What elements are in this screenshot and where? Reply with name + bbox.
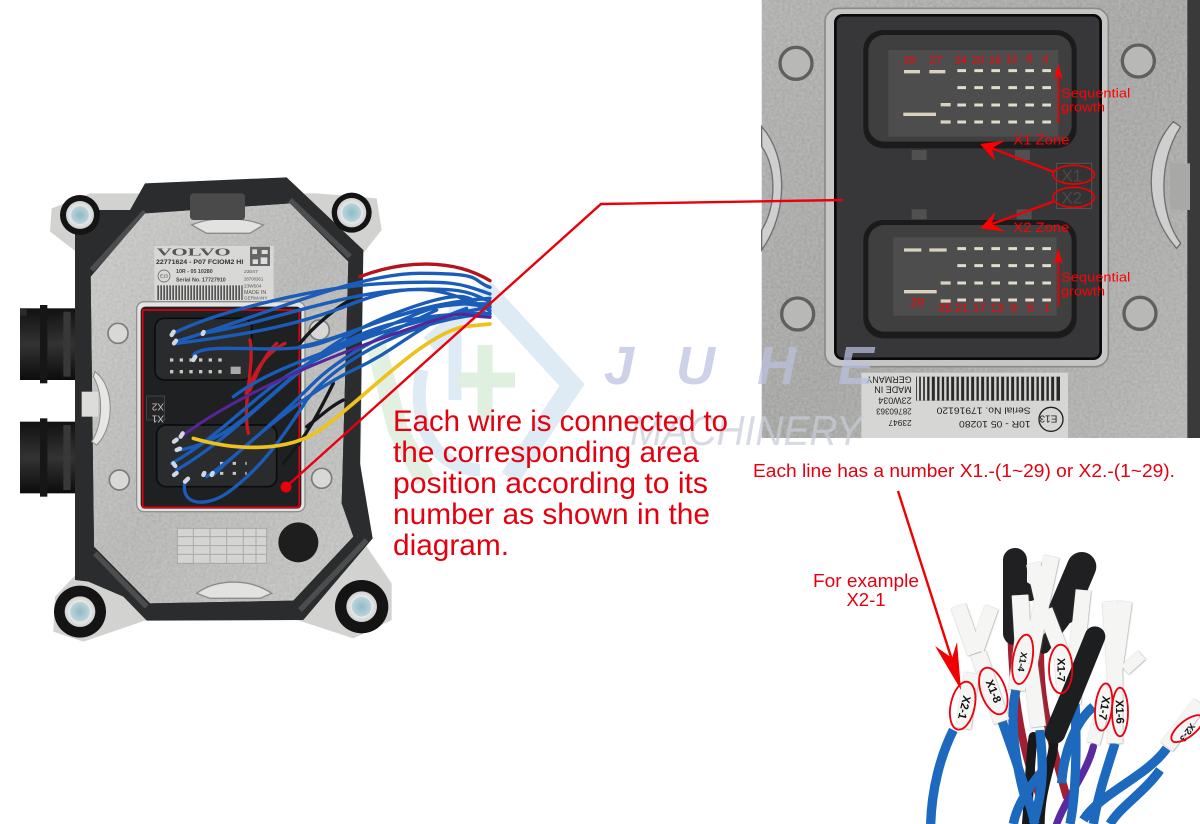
example label: For example [813,570,919,591]
product label: Serial No. 17727910 [176,278,226,284]
plastic frame [75,177,373,621]
sequential growth text X1: growth [1061,99,1105,114]
red wires [360,264,490,281]
X2 pin numbers: 13 [990,301,1004,315]
product label: 23W504 [244,283,262,288]
panel: close-up of connectors photo [762,0,1200,438]
wire number tags: X2-1 [955,694,972,720]
white terminals [172,332,213,482]
instruction text: position according to its [393,467,708,500]
rotated serial label: 23947 [888,418,912,428]
dark recess [835,15,1101,359]
arrow to X1 [980,141,1053,172]
wire number tags: X1-4 [1016,651,1029,673]
dark connector recess [137,302,305,512]
caption: line numbers: Each line has a number X1.-(1~29) or X2.-(1~29). [753,461,1175,481]
product label: 10R - 05 10280 [176,269,213,275]
X1 X2 moulded marks: X2 [1062,188,1082,207]
purple wire [183,314,490,435]
product label [154,246,274,301]
white margin below photo [760,438,1200,444]
housing rim [825,8,1108,367]
watermark text [604,336,916,454]
connector X2 [863,209,1077,338]
leader line from ECU to close-up [280,200,843,492]
product label: MADE IN [244,290,266,296]
X1 X2 mark [147,396,165,423]
sequential growth arrow X1 [1054,63,1063,123]
wire number tags: X1-8 [983,678,1003,705]
rotated serial label: GERMANY [866,375,912,385]
sequential growth text X1: Sequential [1061,85,1130,100]
wire number tags: X1-7 [1096,695,1112,721]
rotated serial label: MADE IN [874,385,912,395]
X1 pin numbers: 27 [929,54,942,66]
X1 X2 mark: X2 [151,400,164,411]
wire number tags: X1-7 [1054,658,1066,682]
product label: VOLVO [157,248,231,259]
X1 pin numbers: 24 [955,54,967,66]
black wires [283,298,353,463]
black side connector X2 [20,418,83,497]
sequential growth text X1 [1061,85,1130,114]
frame highlights [92,200,367,610]
X2 pin numbers: 5 [1027,301,1034,315]
instruction text: number as shown in the [393,498,710,531]
silver base plate with mounting ears [50,193,392,642]
wire number tags [955,651,1197,743]
product label: E13 [160,274,168,279]
arrow to example wire [898,491,961,690]
X1 pin numbers: 8 [1027,54,1033,66]
lower connector [157,425,277,487]
X1 pin numbers: 16 [989,54,1001,66]
X2 zone label: X2 Zone [1013,219,1070,235]
side clips [762,127,782,250]
silver main face [91,203,353,603]
example label: X2-1 [846,589,886,610]
red label ellipses [946,633,1200,747]
panel: ECU with wires photo [20,177,490,642]
panel: wire terminals photo [931,557,1200,824]
X1 pin numbers: 12 [1005,54,1018,66]
instruction text [393,405,728,562]
X1 pin numbers: 4 [1042,54,1048,66]
X2 pin numbers [910,296,1051,315]
red wires [1012,643,1067,797]
rotated serial label: 10R - 05 10280 [959,419,1031,429]
yellow wire [193,324,490,447]
watermark text: MACHINERY [630,407,865,454]
instruction text: diagram. [393,529,509,562]
X2 pin numbers: 9 [1010,301,1017,315]
sequential growth text X2: Sequential [1061,269,1130,284]
arrow to X2 [980,202,1053,232]
wire number tags: X1-6 [1113,700,1125,724]
rotated serial label [861,373,1068,438]
mounting bores [54,193,388,638]
sequential growth text X2 [1061,269,1130,298]
screw bosses [108,320,332,490]
instruction text: the corresponding area [393,436,700,469]
product label: 28700361 [244,277,264,282]
X2 pin numbers: 17 [973,301,986,315]
product label: 23047 [244,269,258,275]
rotated serial label: Serial No. 17916120 [937,405,1031,415]
black sleeves [1015,560,1082,647]
X2 ellipse [1053,187,1094,207]
instruction text: Each wire is connected to [393,405,728,438]
sequential growth text X2: growth [1061,283,1105,298]
X1 pin numbers: 28 [903,54,916,66]
wires bundle [172,264,490,502]
upper connector [155,318,252,380]
blue wires [931,690,1167,824]
X2 pin numbers: 21 [955,301,969,315]
purple wire [1057,747,1093,824]
rotated serial label: E13 [1039,413,1057,424]
stamped data block [177,528,267,563]
black heat-shrink sleeve [1055,637,1095,733]
X1 X2 moulded marks: X1 [1062,167,1082,186]
product label: 22771624 - P07 FCIOM2 HI [156,259,244,266]
X1 X2 moulded marks [1057,163,1092,208]
X2 pin numbers: 1 [1044,301,1051,315]
rotated serial label: 28760363 [876,407,912,416]
rotated serial label: 23W034 [878,396,912,406]
connector X1 [863,30,1077,160]
blue wires [172,273,490,502]
X1 pin numbers [903,54,1048,66]
top and bottom clips [82,193,272,598]
X1 X2 mark: X1 [151,412,164,423]
red annotations [903,54,1130,315]
sequential growth arrow X2 [1054,248,1063,307]
black side connector X1 [20,305,83,383]
metal housing [762,0,1200,438]
X1 pin numbers: 20 [972,54,984,66]
product label: GERMANY [244,296,268,301]
X1 zone label: X1 Zone [1013,132,1070,148]
wire number tags: X2-3 [1178,721,1197,743]
watermark text: JUHE [604,336,916,396]
X2 pin numbers: 25 [938,301,952,315]
X1 ellipse [1053,165,1094,184]
black wire [1027,733,1054,824]
example label [813,570,919,610]
white terminals [958,557,1200,747]
X2 pin numbers: 29 [910,296,924,310]
corner bosses [780,45,1156,330]
black plug [278,522,318,562]
red highlight box [143,310,299,507]
watermark logo [372,295,572,480]
